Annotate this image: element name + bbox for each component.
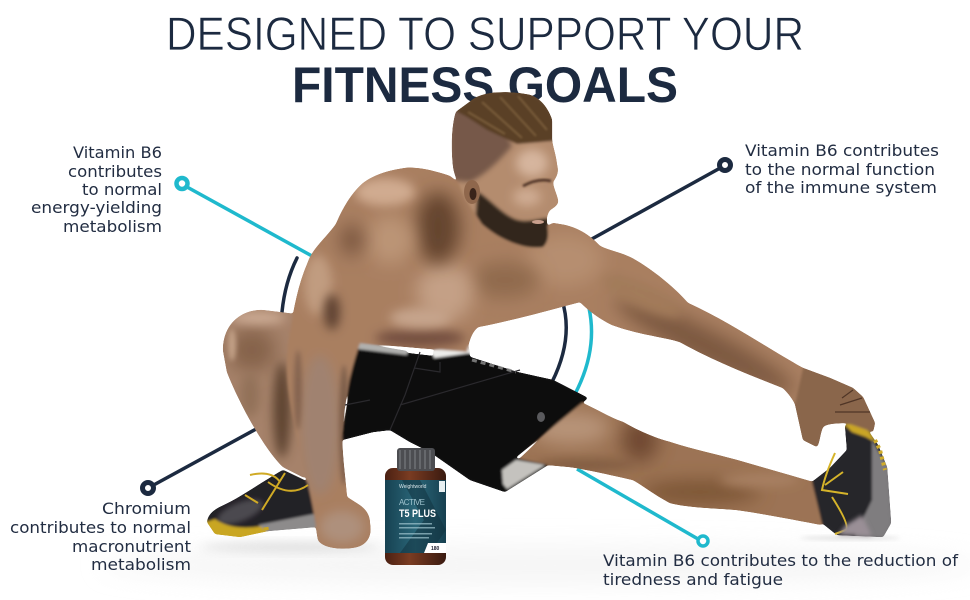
fingers (835, 390, 870, 412)
right shoe highlights (838, 515, 872, 536)
ear (464, 180, 480, 204)
shorts seams and print (345, 352, 520, 430)
connector: top right (590, 160, 730, 240)
text: bottom right benefit: tiredness and fatigue (603, 570, 783, 589)
arc: navy left (282, 258, 297, 312)
lips (532, 220, 544, 224)
athlete figure (207, 88, 891, 560)
text: bottom right benefit (603, 551, 958, 589)
shaved side (450, 105, 512, 182)
brow (523, 180, 551, 186)
text: top left benefit: to normal (82, 180, 162, 199)
connector: bottom left (142, 428, 258, 494)
shorts print (472, 360, 516, 372)
text: bottom left benefit: Chromium (102, 499, 191, 518)
product bottle: ACTIVE (399, 498, 425, 507)
deltoid (355, 178, 415, 206)
text: top left benefit (31, 143, 162, 236)
shorts logo (537, 412, 545, 422)
product bottle: Weightworld (399, 484, 427, 490)
shorts (342, 343, 588, 492)
hair streaks (468, 96, 547, 138)
torso and arms (280, 160, 820, 560)
text: bottom left benefit: contributes to normal (10, 518, 191, 537)
product bottle: 180 (431, 546, 440, 552)
forearm (300, 355, 340, 495)
text: top right benefit (745, 141, 939, 197)
beard (475, 192, 552, 250)
text: bottom left benefit (10, 499, 191, 574)
right shoe laces (822, 453, 848, 534)
body details (240, 96, 885, 536)
heading line 2: FITNESS GOALS (292, 57, 678, 113)
right leg (517, 400, 824, 525)
right shoe (812, 423, 891, 537)
text: top left benefit: metabolism (63, 217, 162, 236)
text: bottom right benefit: Vitamin B6 contributes to the reduction of (603, 551, 958, 570)
floor shadow (100, 536, 970, 585)
product bottle: T5 PLUS (399, 508, 436, 520)
title (166, 7, 804, 113)
right arm shading (613, 299, 797, 400)
heading line 1: DESIGNED TO SUPPORT YOUR (166, 7, 804, 60)
text: top left benefit: energy-yielding (31, 198, 162, 217)
bottle cap (397, 448, 435, 471)
arc: teal right (575, 308, 592, 394)
body silhouettes (207, 88, 891, 560)
hair (456, 92, 552, 146)
text: bottom left benefit: macronutrient (72, 537, 191, 556)
text: top left benefit: contributes (68, 162, 162, 181)
text: top left benefit: Vitamin B6 (73, 143, 162, 162)
arc: navy right (552, 300, 566, 382)
rear leg and knee (222, 310, 306, 480)
connector: bottom right (577, 469, 708, 546)
text: bottom left benefit: metabolism (91, 555, 191, 574)
left shoe sole knobs (240, 528, 270, 533)
connector: top left (176, 178, 312, 256)
upper arm (304, 255, 332, 315)
text: top right benefit: to the normal function (745, 160, 935, 179)
text: top right benefit: Vitamin B6 contributes (745, 141, 939, 160)
right hand (795, 368, 875, 447)
text: top right benefit: of the immune system (745, 178, 937, 197)
left shoe laces (245, 473, 308, 510)
head (452, 92, 558, 249)
product bottle (385, 448, 446, 565)
bottle label (385, 480, 446, 553)
left shoe (207, 470, 316, 537)
right shoe eyelets (875, 440, 885, 470)
